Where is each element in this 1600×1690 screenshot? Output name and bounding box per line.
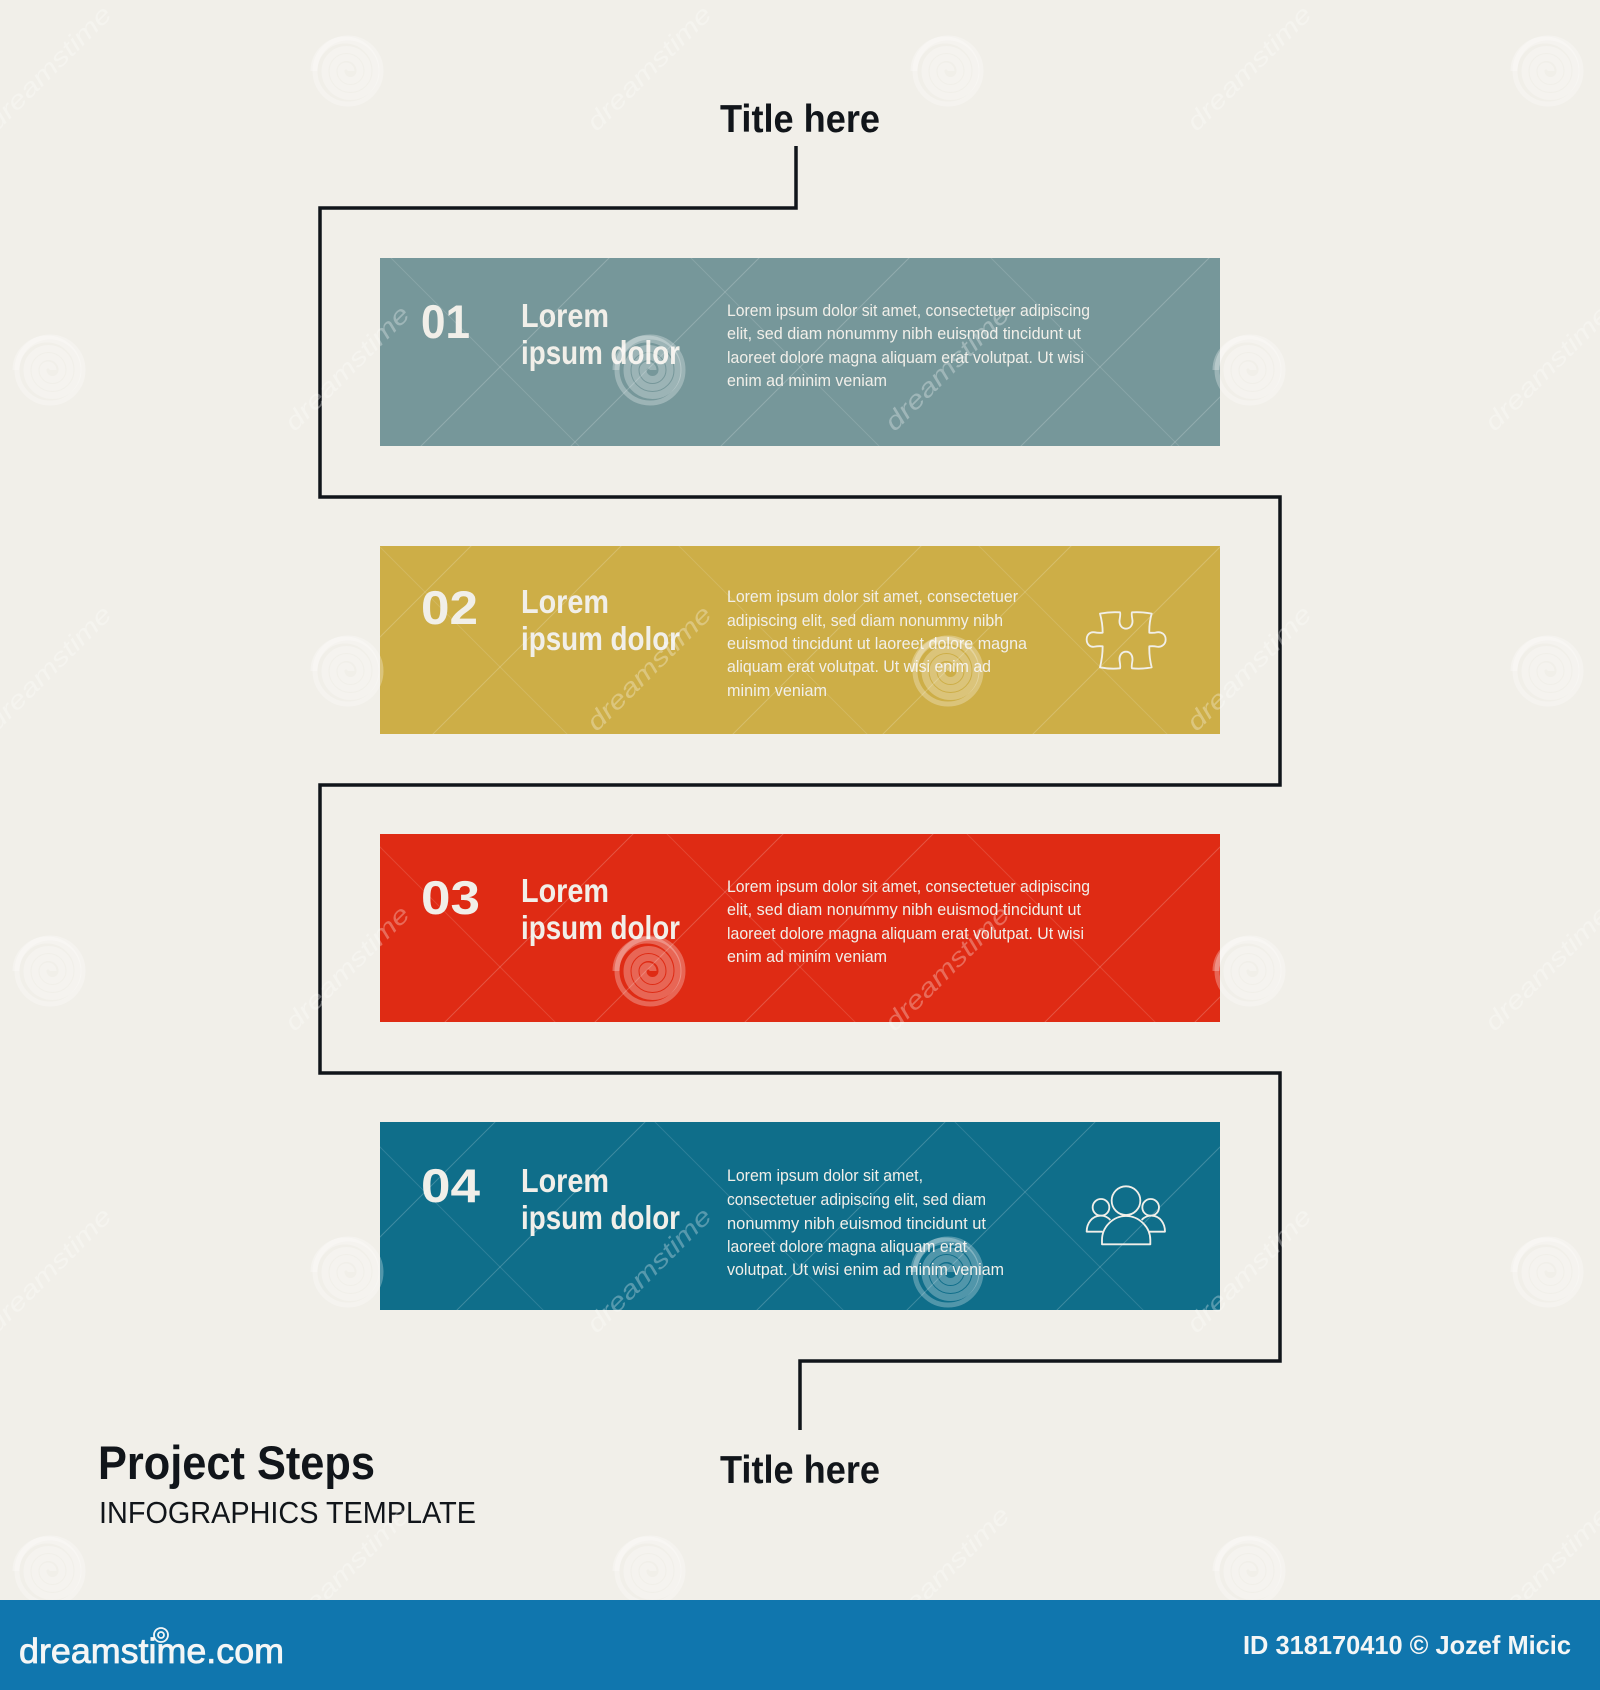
step 02 body text: aliquam erat volutpat. Ut wisi enim ad — [727, 658, 991, 676]
step 04 body text: volutpat. Ut wisi enim ad minim veniam — [727, 1261, 1004, 1279]
icon: logo spiral — [154, 1628, 168, 1642]
watermark overlay: dreamstime — [1479, 900, 1600, 1037]
watermark overlay: dreamstime — [1181, 600, 1318, 737]
watermark overlay: dreamstime — [1181, 0, 1318, 137]
step 01 panel — [380, 258, 1220, 446]
watermark overlay: dreamstime — [879, 1501, 1016, 1638]
step 04 panel — [380, 1122, 1220, 1310]
step 01 body text: elit, sed diam nonummy nibh euismod tincidunt ut — [727, 325, 1081, 343]
step 01 number: 01 — [421, 295, 470, 348]
watermark overlay: dreamstime — [1181, 1202, 1318, 1339]
step 03 heading: ipsum dolor — [521, 909, 680, 946]
step 03 heading: Lorem — [521, 872, 609, 909]
step 03 panel — [380, 834, 1220, 1022]
watermark overlay: dreamstime — [279, 1501, 416, 1638]
step 02 panel — [380, 546, 1220, 734]
step 02 body text: euismod tincidunt ut laoreet dolore magna — [727, 635, 1028, 653]
bottom title: Title here — [720, 1449, 880, 1492]
footer image id and credit: ID 318170410 © Jozef Micic — [1243, 1630, 1571, 1660]
step 02 heading: Lorem — [521, 583, 609, 620]
step 04 number: 04 — [421, 1159, 480, 1212]
watermark overlay: dreamstime — [1479, 1501, 1600, 1638]
watermark overlay: dreamstime — [879, 300, 1016, 437]
step 03 body text: enim ad minim veniam — [727, 948, 887, 966]
main heading: Project Steps: Project Steps — [98, 1436, 375, 1489]
watermark overlay: dreamstime — [1479, 300, 1600, 437]
step 03 body text: Lorem ipsum dolor sit amet, consectetuer adipiscing — [727, 878, 1090, 896]
step 02 heading: ipsum dolor — [521, 620, 680, 657]
connector line between titles and steps — [320, 146, 1280, 1430]
step 01 heading: ipsum dolor — [521, 334, 680, 371]
step 01 body text: enim ad minim veniam — [727, 372, 887, 390]
step 04 body text: consectetuer adipiscing elit, sed diam — [727, 1191, 986, 1209]
step 03 body text: laoreet dolore magna aliquam erat volutpat. Ut wisi — [727, 925, 1084, 943]
step 02 body text: adipiscing elit, sed diam nonummy nibh — [727, 612, 1003, 630]
watermark overlay: dreamstime — [279, 300, 416, 437]
watermark overlay: dreamstime — [879, 900, 1016, 1037]
step 04 heading: Lorem — [521, 1162, 609, 1199]
step 04 body text: Lorem ipsum dolor sit amet, — [727, 1167, 923, 1185]
watermark overlay: dreamstime — [581, 1202, 718, 1339]
step 04 body text: laoreet dolore magna aliquam erat — [727, 1238, 967, 1256]
watermark overlay: dreamstime — [581, 600, 718, 737]
footer bar — [0, 1600, 1600, 1690]
top title: Title here — [720, 98, 880, 141]
icon: group of people — [1087, 1186, 1165, 1244]
step 03 number: 03 — [421, 871, 480, 924]
watermark overlay: dreamstime — [279, 900, 416, 1037]
step 03 body text: elit, sed diam nonummy nibh euismod tincidunt ut — [727, 901, 1081, 919]
step 01 body text: Lorem ipsum dolor sit amet, consectetuer adipiscing — [727, 302, 1090, 320]
footer logo text: dreamstime.com — [19, 1632, 284, 1671]
step 02 body text: minim veniam — [727, 682, 827, 700]
step 01 heading: Lorem — [521, 297, 609, 334]
subheading: infographics template: INFOGRAPHICS TEMPLATE — [99, 1495, 476, 1530]
watermark overlay: dreamstime — [581, 0, 718, 137]
step 04 heading: ipsum dolor — [521, 1199, 680, 1236]
icon: puzzle piece — [1087, 612, 1166, 669]
step 02 body text: Lorem ipsum dolor sit amet, consectetuer — [727, 588, 1018, 606]
step 01 body text: laoreet dolore magna aliquam erat volutpat. Ut wisi — [727, 349, 1084, 367]
step 04 body text: nonummy nibh euismod tincidunt ut — [727, 1215, 986, 1233]
step 02 number: 02 — [421, 581, 478, 634]
